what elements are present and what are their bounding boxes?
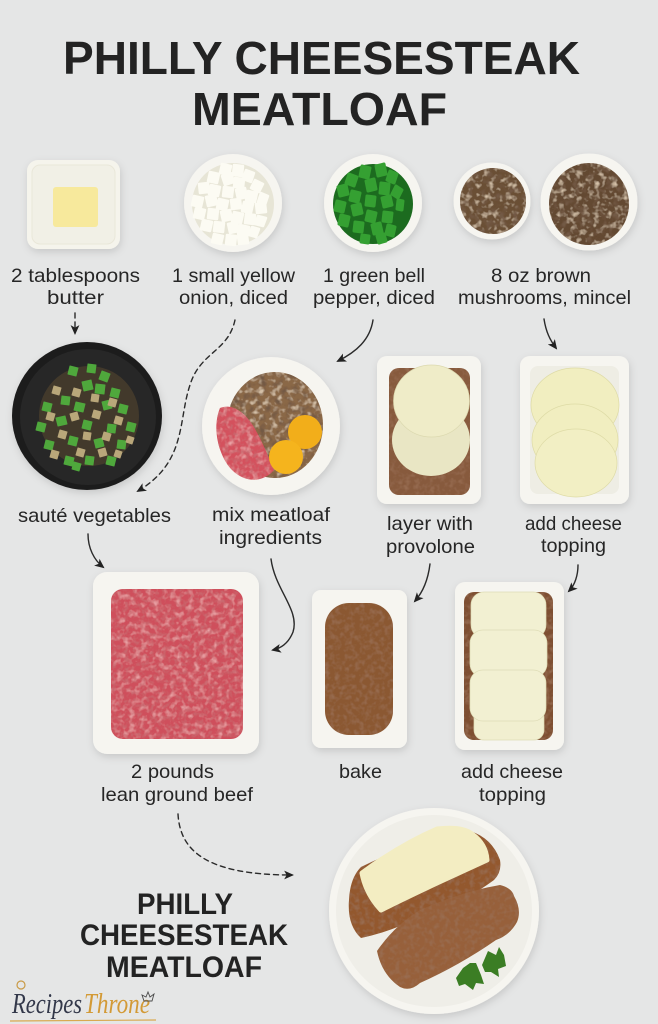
- meatloaf slice: [377, 885, 519, 989]
- label: pepper: [313, 265, 435, 309]
- label: provolone: layer with: [387, 513, 473, 535]
- label: butter: [11, 265, 140, 309]
- bottom title: PHILLY: [137, 888, 233, 921]
- label: pepper: 1 green bell: [323, 265, 425, 287]
- arrow: mushrooms to cheese tray: [544, 319, 556, 348]
- label: beef: lean ground beef: [101, 784, 254, 806]
- green pepper bowl: [324, 154, 422, 252]
- label: mix: [212, 504, 331, 549]
- label: provolone: provolone: [386, 536, 475, 558]
- title: PHILLY CHEESESTEAK: [63, 32, 580, 84]
- label: onion: onion, diced: [179, 287, 288, 309]
- large mushroom bowl: [540, 154, 638, 250]
- arrow: provolone to bake: [415, 564, 430, 601]
- label: add cheese: [461, 761, 563, 806]
- label: add cheese: topping: [479, 784, 546, 806]
- egg yolks: [269, 415, 322, 474]
- label: provolone: [386, 513, 475, 558]
- arrow: onion to pan: [138, 320, 235, 491]
- label: pepper: pepper, diced: [313, 287, 435, 309]
- loaf tray: bake: [312, 590, 407, 748]
- beef dish: [93, 572, 259, 754]
- mixing bowl: [202, 357, 340, 495]
- plate: [329, 808, 539, 1014]
- onion bowl: [184, 154, 282, 252]
- icon: crown: [142, 992, 154, 1001]
- icon: butter pat: [53, 187, 98, 227]
- label: mushrooms: 8 oz brown: [491, 265, 591, 287]
- ground mixture: [227, 372, 323, 478]
- label: beef: 2 pounds: [131, 761, 214, 783]
- saute pan: [12, 342, 162, 490]
- tray: layer provolone: [377, 356, 481, 504]
- icon: parsley: [456, 947, 506, 990]
- meatloaf slice with cheese: [349, 828, 500, 938]
- label: cheese topping: topping: [541, 535, 606, 557]
- tray: add cheese topping: [520, 356, 629, 504]
- butter dish: [27, 160, 120, 249]
- label: onion: 1 small yellow: [172, 265, 296, 287]
- arrow: mix to beef: [271, 559, 294, 650]
- arrow: butter to pan: [74, 313, 76, 333]
- logo: Throne: [84, 989, 150, 1020]
- label: cheese topping: add cheese: [525, 513, 622, 535]
- bottom title: [80, 888, 288, 984]
- bottom title: CHEESESTEAK: [80, 919, 288, 952]
- logo: Recipes: [11, 989, 82, 1020]
- label: cheese topping: [525, 513, 622, 557]
- label: butter: 2 tablespoons: [11, 265, 140, 287]
- vegetables in pan: [36, 364, 139, 471]
- label: mushrooms: [458, 265, 631, 309]
- label: add cheese: add cheese: [461, 761, 563, 783]
- title: [63, 32, 580, 135]
- arrow: pepper to mix: [338, 320, 373, 361]
- label: mix: mix meatloaf: [212, 504, 331, 526]
- label: bake: bake: [339, 761, 382, 783]
- logo: [10, 981, 156, 1021]
- icon: chef hat: [17, 981, 25, 989]
- label: beef: [101, 761, 254, 806]
- loaf tray: cheese slices: [455, 582, 564, 750]
- title: MEATLOAF: [192, 83, 447, 135]
- label: saute: sauté vegetables: [18, 505, 171, 527]
- label: onion: [172, 265, 296, 309]
- small mushroom bowl: [454, 162, 530, 240]
- bottom title: MEATLOAF: [106, 951, 262, 984]
- label: mushrooms: mushrooms, mincel: [458, 287, 631, 309]
- arrow: beef to plate: [178, 814, 292, 875]
- arrow: saute to beef: [88, 534, 103, 567]
- label: mix: ingredients: [219, 527, 322, 549]
- arrow: cheese to tray: [569, 565, 578, 591]
- raw beef wedge: [216, 407, 274, 480]
- label: butter: butter: [47, 287, 105, 309]
